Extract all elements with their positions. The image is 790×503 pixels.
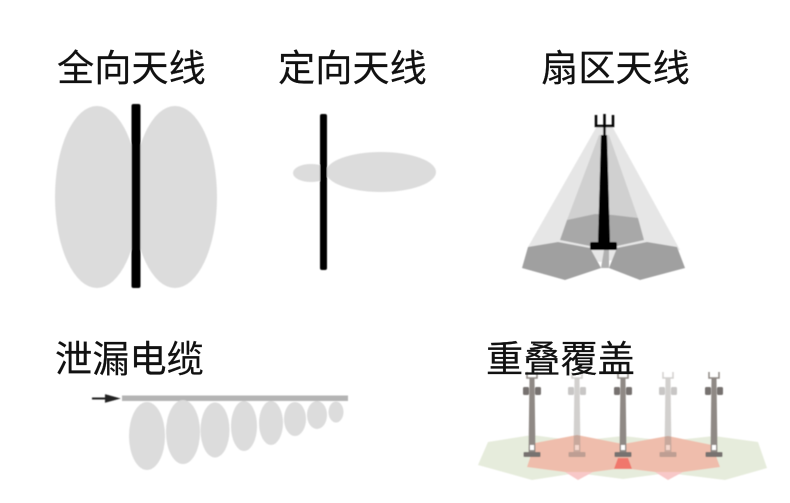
heading: 重叠覆盖: 重叠覆盖 bbox=[486, 338, 635, 380]
heading: 定向天线: 定向天线 bbox=[278, 47, 427, 89]
diagram: sector tower with coverage cones bbox=[522, 114, 685, 280]
panel: leaky cable bbox=[55, 338, 348, 470]
diagram: leaky cable radiation lobes bbox=[92, 396, 348, 470]
arrow: signal direction bbox=[92, 396, 117, 402]
diagram: directional lobe and mast bbox=[293, 114, 436, 270]
panel: omnidirectional antenna bbox=[55, 47, 217, 288]
cable bar bbox=[122, 396, 348, 401]
panel: overlapping coverage bbox=[478, 338, 767, 480]
heading: 全向天线: 全向天线 bbox=[57, 47, 206, 89]
diagram: omnidirectional lobes and mast bbox=[55, 104, 217, 288]
heading: 泄漏电缆: 泄漏电缆 bbox=[55, 338, 204, 380]
heading: 扇区天线: 扇区天线 bbox=[541, 47, 690, 89]
diagram: overlapping coverage towers bbox=[478, 372, 767, 480]
panel: directional antenna bbox=[278, 47, 436, 270]
panel: sector antenna bbox=[522, 47, 690, 280]
